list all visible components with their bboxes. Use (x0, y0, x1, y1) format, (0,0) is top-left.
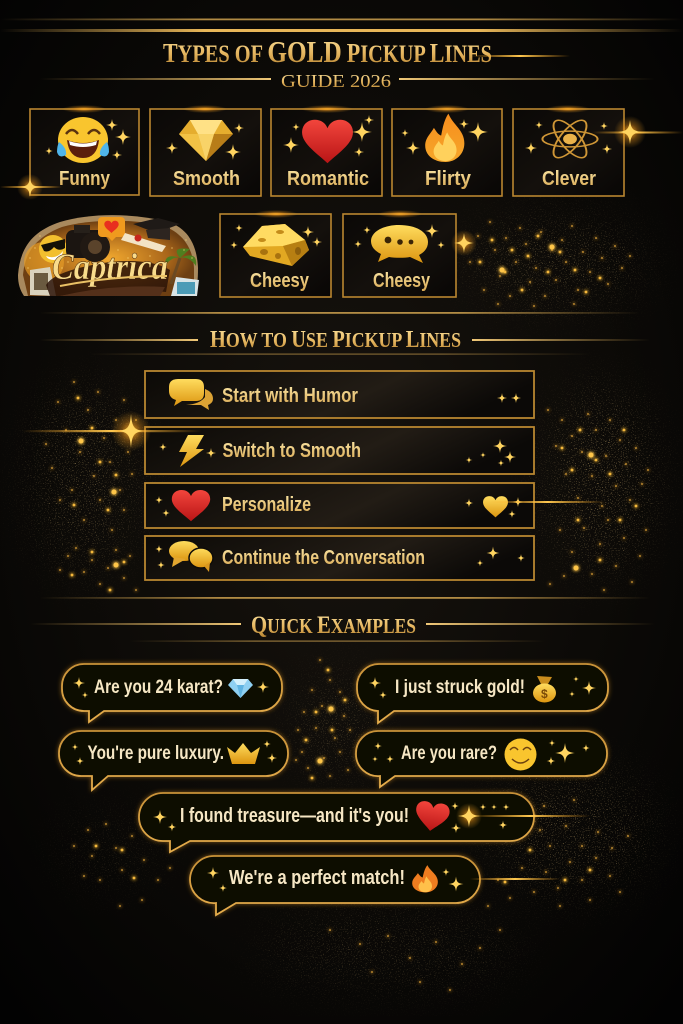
card: clever (513, 105, 624, 196)
step: personalize: Personalize (222, 494, 311, 516)
bubble: perfect match (190, 856, 560, 915)
subtitle: guide 2026: GUIDE 2026 (281, 71, 391, 91)
panel: types of pickup lines (30, 105, 624, 297)
flare: beside cheesy card (451, 230, 477, 256)
bubble: pure luxury: You're pure luxury. (88, 743, 224, 764)
bubble: are you rare (356, 731, 607, 787)
bubble: found treasure (139, 793, 590, 852)
card: flirty (392, 105, 502, 196)
flare: left of first row (0, 174, 62, 200)
step: personalize (145, 483, 534, 528)
card: funny: Funny (59, 168, 111, 190)
card: cheesy speech (343, 210, 456, 297)
bubble: are you 24 karat (62, 664, 282, 722)
bubble: perfect match: We're a perfect match! (229, 867, 405, 889)
card: romantic (271, 105, 382, 196)
panel: steps (145, 371, 534, 580)
flare: left of steps (22, 411, 202, 451)
step: switch to smooth (145, 427, 534, 474)
title: TYPES OF GOLD PICKUP LINES (163, 34, 492, 69)
panel: examples (59, 664, 608, 915)
card: clever: Clever (542, 168, 596, 190)
step: switch to smooth: Switch to Smooth (222, 440, 361, 462)
flare: right of personalize (490, 501, 605, 503)
heading: how to use: HOW TO USE PICKUP LINES (210, 327, 461, 353)
step: start with humor: Start with Humor (222, 385, 358, 407)
top double rule (0, 18, 683, 32)
card: smooth: Smooth (173, 168, 240, 190)
gold particle fields (46, 222, 648, 990)
bubble: i just struck gold: I just struck gold! (395, 677, 525, 698)
card: cheesy speech: Cheesy (373, 270, 431, 292)
card: cheesy block (220, 210, 331, 297)
logo: captrica: Captrica (52, 247, 168, 288)
bubble: are you 24 karat: Are you 24 karat? (94, 677, 223, 698)
bubble: i just struck gold (357, 664, 608, 723)
card: cheesy block: Cheesy (250, 270, 310, 292)
flare: right of clever card (592, 116, 683, 148)
section divider (40, 312, 640, 314)
step: continue the conversation: Continue the Conversation (222, 547, 425, 569)
section divider (40, 597, 650, 599)
card: romantic: Romantic (287, 168, 369, 190)
bubble: pure luxury (59, 731, 288, 790)
bubble: i just struck gold: $ (541, 687, 548, 701)
card: flirty: Flirty (425, 168, 472, 190)
step: start with humor (145, 371, 534, 418)
step: continue the conversation (145, 536, 534, 580)
bubble: are you rare: Are you rare? (401, 743, 497, 764)
heading: quick examples: QUICK EXAMPLES (251, 612, 416, 639)
card: smooth (150, 105, 261, 196)
logo: captrica (18, 215, 199, 296)
card: funny (30, 105, 139, 195)
bubble: found treasure: I found treasure—and it's you! (180, 805, 409, 827)
